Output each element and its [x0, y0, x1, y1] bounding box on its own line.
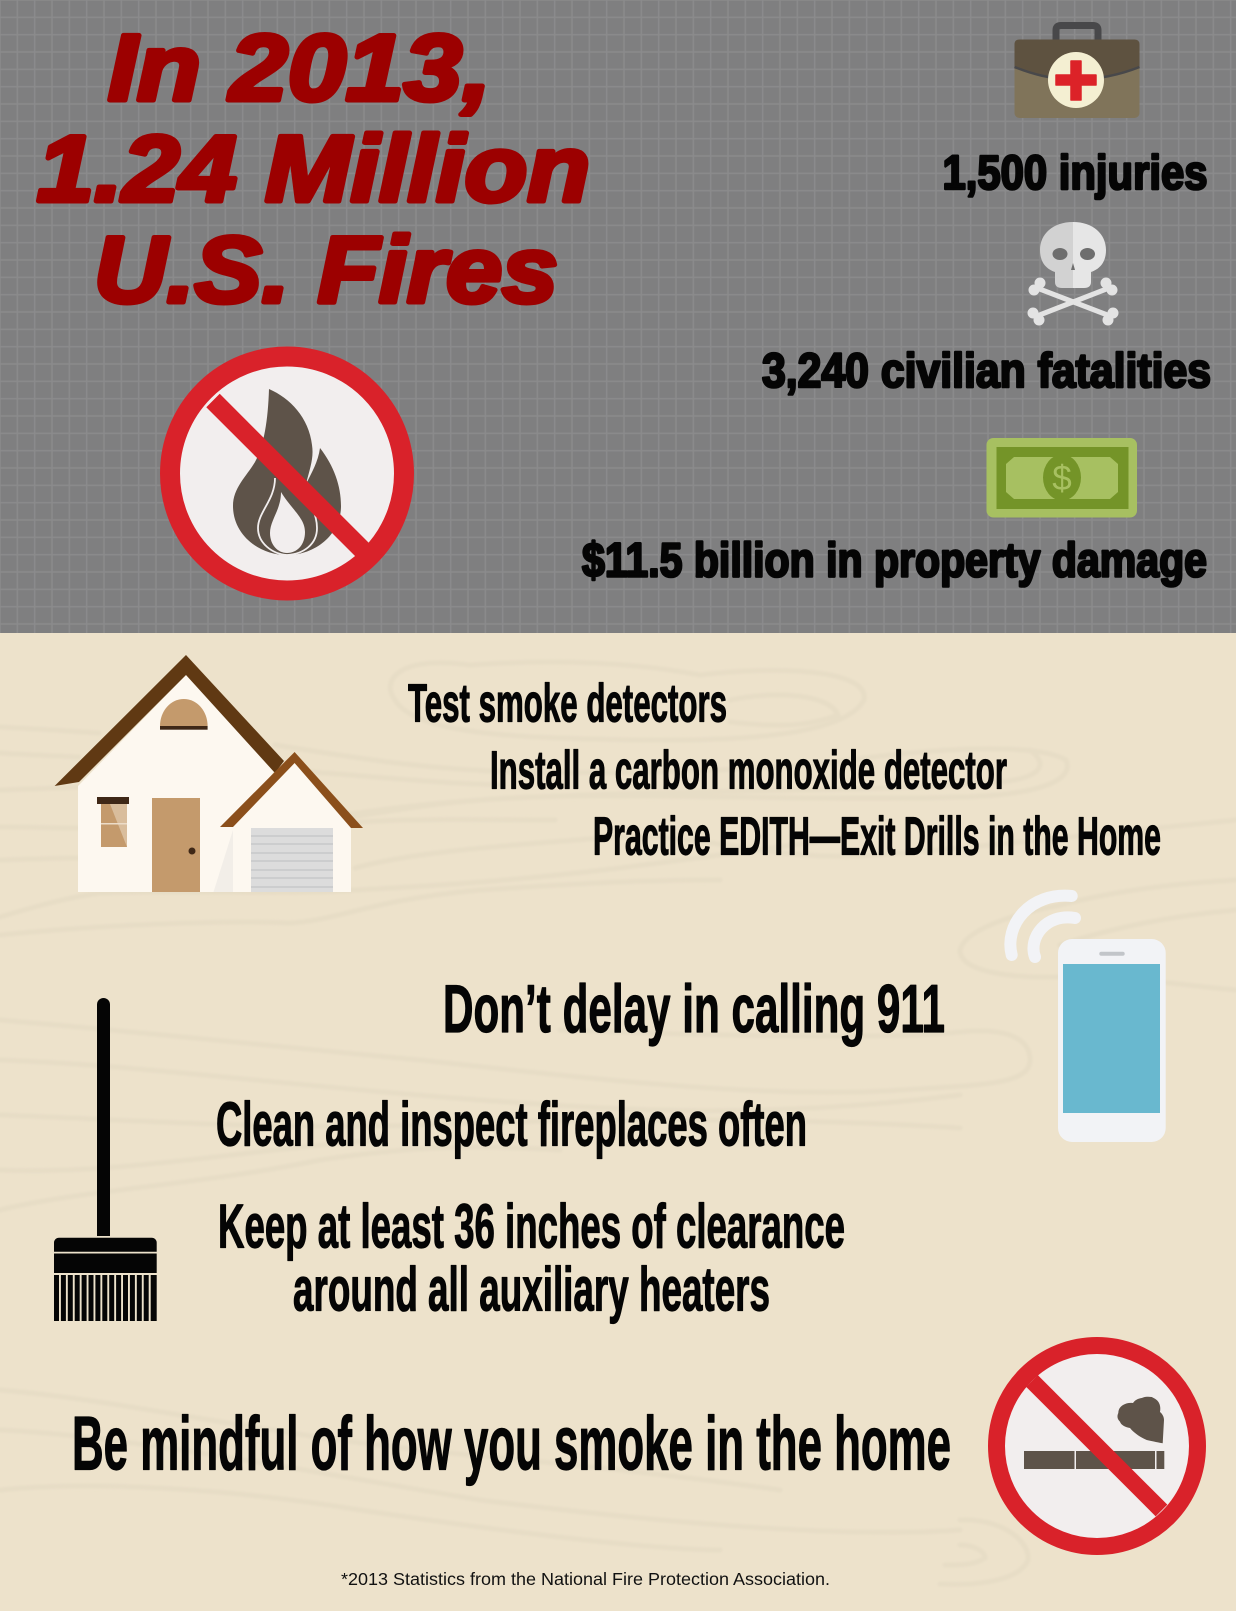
icon: broom — [54, 998, 157, 1321]
text: keep clearance around heaters: around all auxiliary heaters — [293, 1256, 770, 1324]
text: clean and inspect fireplaces: Clean and inspect fireplaces often — [216, 1090, 807, 1160]
icon: flame — [233, 389, 341, 555]
icon: no smoking sign — [996, 1346, 1198, 1546]
title: 1.24 Million — [37, 116, 590, 221]
icon: medical briefcase — [1014, 26, 1140, 118]
text: keep clearance around heaters — [218, 1192, 845, 1324]
icon: no fire sign — [170, 356, 404, 590]
footnote: *2013 Statistics from the National Fire Protection Association. — [341, 1569, 830, 1589]
title: U.S. Fires — [94, 217, 558, 322]
icon: dollar bill — [986, 438, 1137, 518]
icon: skull and crossbones — [1030, 222, 1116, 323]
panel: safety tips background — [0, 633, 1236, 1611]
text: don't delay in calling 911: Don’t delay in calling 911 — [443, 971, 945, 1047]
icon: dollar bill: $ — [1052, 459, 1072, 498]
title — [37, 15, 590, 322]
icon: phone with signal — [1010, 896, 1166, 1142]
icon: house — [55, 655, 363, 892]
text: test smoke detectors: Test smoke detectors — [408, 674, 727, 734]
title: In 2013, — [108, 15, 491, 120]
panel: statistics background — [0, 0, 1236, 633]
